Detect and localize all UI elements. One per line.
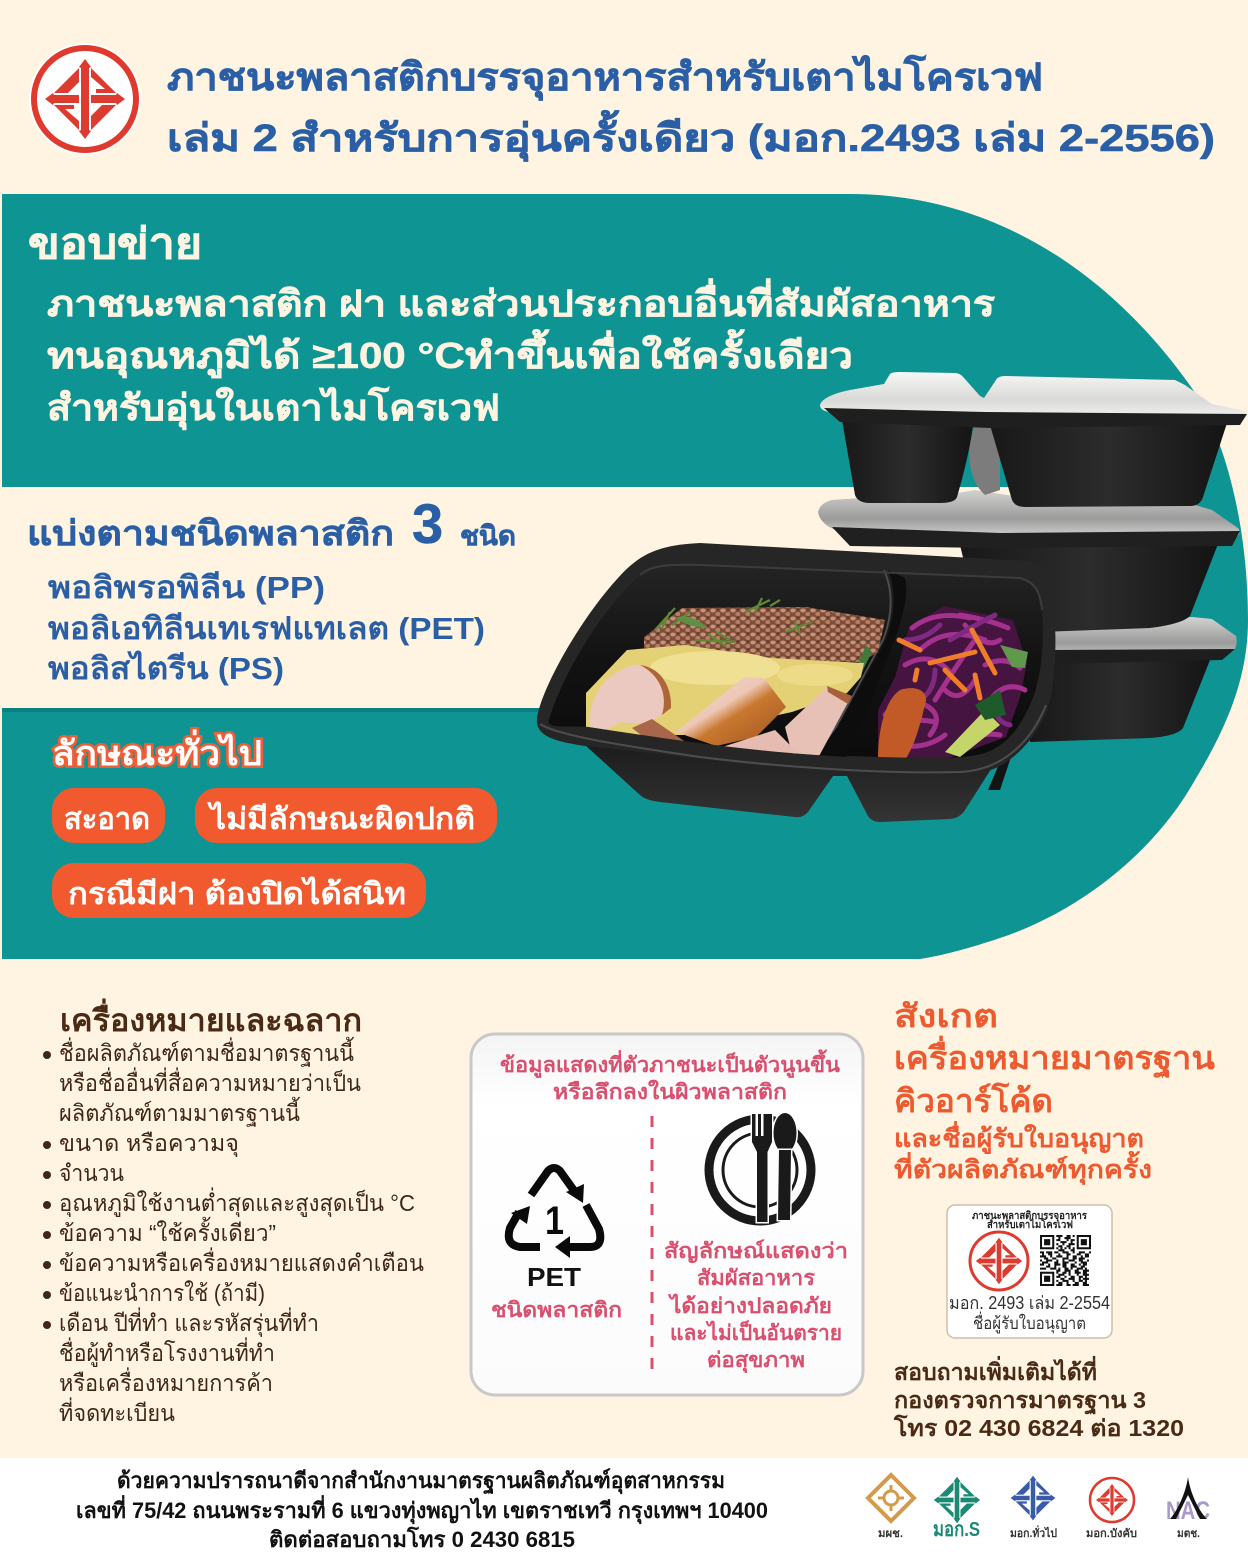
mark title — [972, 1210, 1087, 1231]
text block: scope description: สำหรับอุ่นในเตาไมโครเวฟ — [47, 386, 500, 431]
salad base — [878, 606, 1027, 760]
container interior — [549, 565, 1043, 758]
icon: NAC logo: NAC — [1166, 1497, 1210, 1525]
heading: notice: คิวอาร์โค้ด — [894, 1082, 1053, 1119]
text block: enquiries: กองตรวจการมาตรฐาน 3 — [894, 1387, 1146, 1415]
illustration: open meal container with food — [537, 543, 1055, 822]
icon: NAC logo — [1166, 1477, 1210, 1540]
panel: teal banner — [2, 194, 1248, 959]
icon: mandatory TIS logo: มอก.บังคับ — [1086, 1527, 1137, 1540]
text block: plastic type list — [48, 570, 485, 686]
text block: marking list: ข้อความหรือเครื่องหมายแสดงคำเตือน — [59, 1247, 424, 1276]
text block: marking list: อุณหภูมิใช้งานต่ำสุดและสูงสุดเป็น °C — [59, 1187, 415, 1217]
text block: plastic type list: พอลิพรอพิลีน (PP) — [48, 570, 325, 605]
heading: general characteristics: ลักษณะทั่วไป — [52, 729, 262, 773]
top stacked container — [820, 372, 1247, 507]
carrot sticks — [899, 630, 995, 698]
heading: scope: ขอบข่าย — [28, 220, 202, 267]
text: food-safe symbol meaning: ต่อสุขภาพ — [707, 1349, 805, 1374]
divider — [650, 1116, 654, 1378]
panel: sample licence mark — [947, 1205, 1112, 1338]
heading: notice: เครื่องหมายมาตรฐาน — [894, 1035, 1215, 1079]
icon: community product standard logo — [868, 1475, 914, 1540]
text block: marking list: ชื่อผู้ทำหรือโรงงานที่ทำ — [59, 1337, 275, 1367]
meat slice right — [785, 687, 851, 758]
title: เล่ม 2 สำหรับการอุ่นครั้งเดียว (มอก.2493 เล่ม 2-2556) — [167, 110, 1215, 162]
heading: notice: ที่ตัวผลิตภัณฑ์ทุกครั้ง — [894, 1150, 1152, 1186]
text block: scope description: ทนอุณหภูมิได้ ≥100 °Cทำขึ้นเพื่อใช้ครั้งเดียว — [47, 329, 853, 379]
licence number: มอก. 2493 เล่ม 2-2554 — [949, 1293, 1110, 1313]
heading: plastic types: 3 — [412, 492, 443, 555]
badge: clean: สะอาด — [64, 803, 150, 836]
text block: scope description — [47, 278, 996, 431]
text block: marking list: ที่จดทะเบียน — [59, 1397, 175, 1426]
badge: lid closes tightly — [52, 863, 426, 918]
icon: general TIS logo: มอก.ทั่วไป — [1010, 1525, 1057, 1540]
cucumber and greens — [945, 645, 1028, 757]
icon: TIS-S logo: มอก.S — [933, 1519, 980, 1541]
icon: QR code — [1040, 1236, 1091, 1285]
text block: footer address: ด้วยความปรารถนาดีจากสำนักงานมาตรฐานผลิตภัณฑ์อุตสาหกรรม — [117, 1468, 725, 1495]
text: food-safe symbol meaning: ได้อย่างปลอดภัย — [668, 1293, 832, 1318]
title — [167, 54, 1215, 162]
lower container body — [585, 745, 1000, 822]
text block: marking list: ชื่อผลิตภัณฑ์ตามชื่อมาตรฐานนี้ — [59, 1037, 354, 1067]
heading: marks and labels: เครื่องหมายและฉลาก — [60, 998, 362, 1038]
dill sprigs — [655, 598, 812, 646]
badge: lid closes tightly: กรณีมีฝา ต้องปิดได้สนิท — [68, 876, 406, 911]
icon: food-safe plate, fork and spoon — [709, 1113, 811, 1222]
heading: plastic types — [27, 492, 516, 555]
panel heading: ข้อมูลแสดงที่ตัวภาชนะเป็นตัวนูนขึ้น — [500, 1049, 841, 1079]
mark title: สำหรับเตาไมโครเวฟ — [987, 1218, 1073, 1231]
licensee: ชื่อผู้รับใบอนุญาต — [973, 1311, 1086, 1334]
text block: marking list: ข้อความ “ใช้ครั้งเดียว” — [59, 1217, 276, 1246]
bottom stacked container — [1030, 617, 1237, 742]
panel heading — [500, 1049, 841, 1104]
rim highlights — [540, 705, 1046, 772]
title: ภาชนะพลาสติกบรรจุอาหารสำหรับเตาไมโครเวฟ — [167, 54, 1043, 101]
icon: TIS-S logo — [933, 1477, 980, 1541]
text: food-safe symbol meaning: และไม่เป็นอันตราย — [670, 1319, 842, 1345]
mashed potato — [586, 645, 864, 735]
badge: no defects: ไม่มีลักษณะผิดปกติ — [207, 801, 475, 836]
illustration: stacked containers — [818, 372, 1247, 742]
heading: notice — [894, 998, 1215, 1186]
compartment divider — [816, 570, 906, 757]
heading: notice: สังเกต — [894, 998, 998, 1034]
text block: plastic type list: พอลิสไตรีน (PS) — [48, 650, 284, 686]
middle stacked container — [818, 490, 1240, 632]
text block: footer address — [76, 1468, 768, 1552]
text block: marking list: ข้อแนะนำการใช้ (ถ้ามี) — [59, 1280, 265, 1306]
text block: footer address: ติดต่อสอบถามโทร 0 2430 6815 — [269, 1526, 575, 1552]
icon: TISI logo — [29, 43, 141, 155]
roast slice — [676, 677, 786, 746]
text block: marking list: เดือน ปีที่ทำ และรหัสรุ่นที่ทำ — [59, 1307, 319, 1337]
text: food-safe symbol meaning: สัมผัสอาหาร — [697, 1267, 816, 1290]
sausage — [878, 688, 926, 760]
panel heading: หรือลึกลงในผิวพลาสติก — [553, 1079, 787, 1104]
label: PET: PET — [527, 1262, 581, 1292]
panel: cream plastic types band — [0, 487, 1120, 708]
text: food-safe symbol meaning — [664, 1239, 848, 1374]
icon: mandatory TIS logo — [1086, 1478, 1137, 1540]
icon: recycling symbol 1 — [509, 1168, 600, 1258]
buckwheat — [644, 607, 885, 662]
badge: no defects — [195, 788, 497, 843]
text: food-safe symbol meaning: สัญลักษณ์แสดงว่า — [664, 1239, 848, 1264]
text block: marking list: จำนวน — [59, 1160, 124, 1186]
label: plastic type: ชนิดพลาสติก — [491, 1299, 622, 1322]
text block: marking list — [43, 1037, 424, 1426]
food clipped to interior — [586, 598, 1028, 760]
text block: plastic type list: พอลิเอทิลีนเทเรฟแทเลต (PET) — [48, 611, 485, 646]
text block: marking list: ผลิตภัณฑ์ตามมาตรฐานนี้ — [59, 1097, 300, 1127]
text block: scope description: ภาชนะพลาสติก ฝา และส่วนประกอบอื่นที่สัมผัสอาหาร — [47, 278, 996, 324]
icon: general TIS logo — [1010, 1476, 1057, 1540]
text block: marking list: หรือชื่ออื่นที่สื่อความหมายว่าเป็น — [59, 1067, 361, 1096]
panel: footer — [0, 1458, 1248, 1560]
meat piece brown — [632, 719, 684, 741]
icon: community product standard logo: มผช. — [878, 1528, 903, 1540]
cabbage strands — [885, 615, 1025, 752]
icon: recycling symbol 1: 1 — [545, 1199, 564, 1243]
panel: embossed marks — [471, 1034, 863, 1395]
badge: clean — [52, 788, 165, 843]
mark title: ภาชนะพลาสติกบรรจุอาหาร — [972, 1210, 1087, 1223]
icon: NAC logo: มตช. — [1177, 1528, 1200, 1540]
text block: marking list: หรือเครื่องหมายการค้า — [59, 1367, 273, 1396]
meat slice — [590, 665, 670, 730]
rim — [537, 543, 1055, 775]
heading: plastic types: ชนิด — [460, 521, 516, 551]
heading: plastic types: แบ่งตามชนิดพลาสติก — [27, 515, 394, 553]
text block: enquiries: สอบถามเพิ่มเติมได้ที่ — [894, 1355, 1097, 1385]
text block: footer address: เลขที่ 75/42 ถนนพระรามที่ 6 แขวงทุ่งพญาไท เขตราชเทวี กรุงเทพฯ 10400 — [76, 1494, 768, 1525]
icon: red logo — [970, 1232, 1028, 1290]
heading: notice: และชื่อผู้รับใบอนุญาต — [894, 1121, 1144, 1155]
text block: marking list: ขนาด หรือความจุ — [59, 1130, 239, 1157]
text block: enquiries — [893, 1355, 1184, 1441]
meat slice small — [724, 730, 799, 754]
text block: enquiries: โทร 02 430 6824 ต่อ 1320 — [893, 1414, 1184, 1441]
